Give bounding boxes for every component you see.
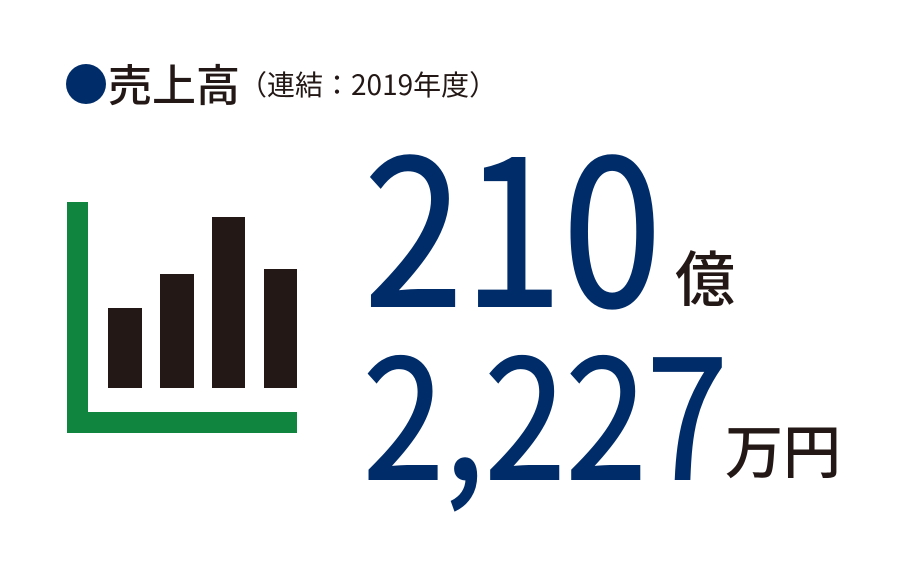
number: 2,227: 2,227 bbox=[363, 288, 728, 527]
heading: sales: 売上高 bbox=[108, 50, 240, 114]
unit: oku: 億 bbox=[675, 232, 735, 319]
subheading: consolidated 2019: （連結：2019年度） bbox=[239, 64, 497, 104]
unit: man yen: 万円 bbox=[725, 406, 841, 490]
bullet dot bbox=[66, 64, 106, 104]
number: 210: 210 bbox=[364, 73, 662, 365]
